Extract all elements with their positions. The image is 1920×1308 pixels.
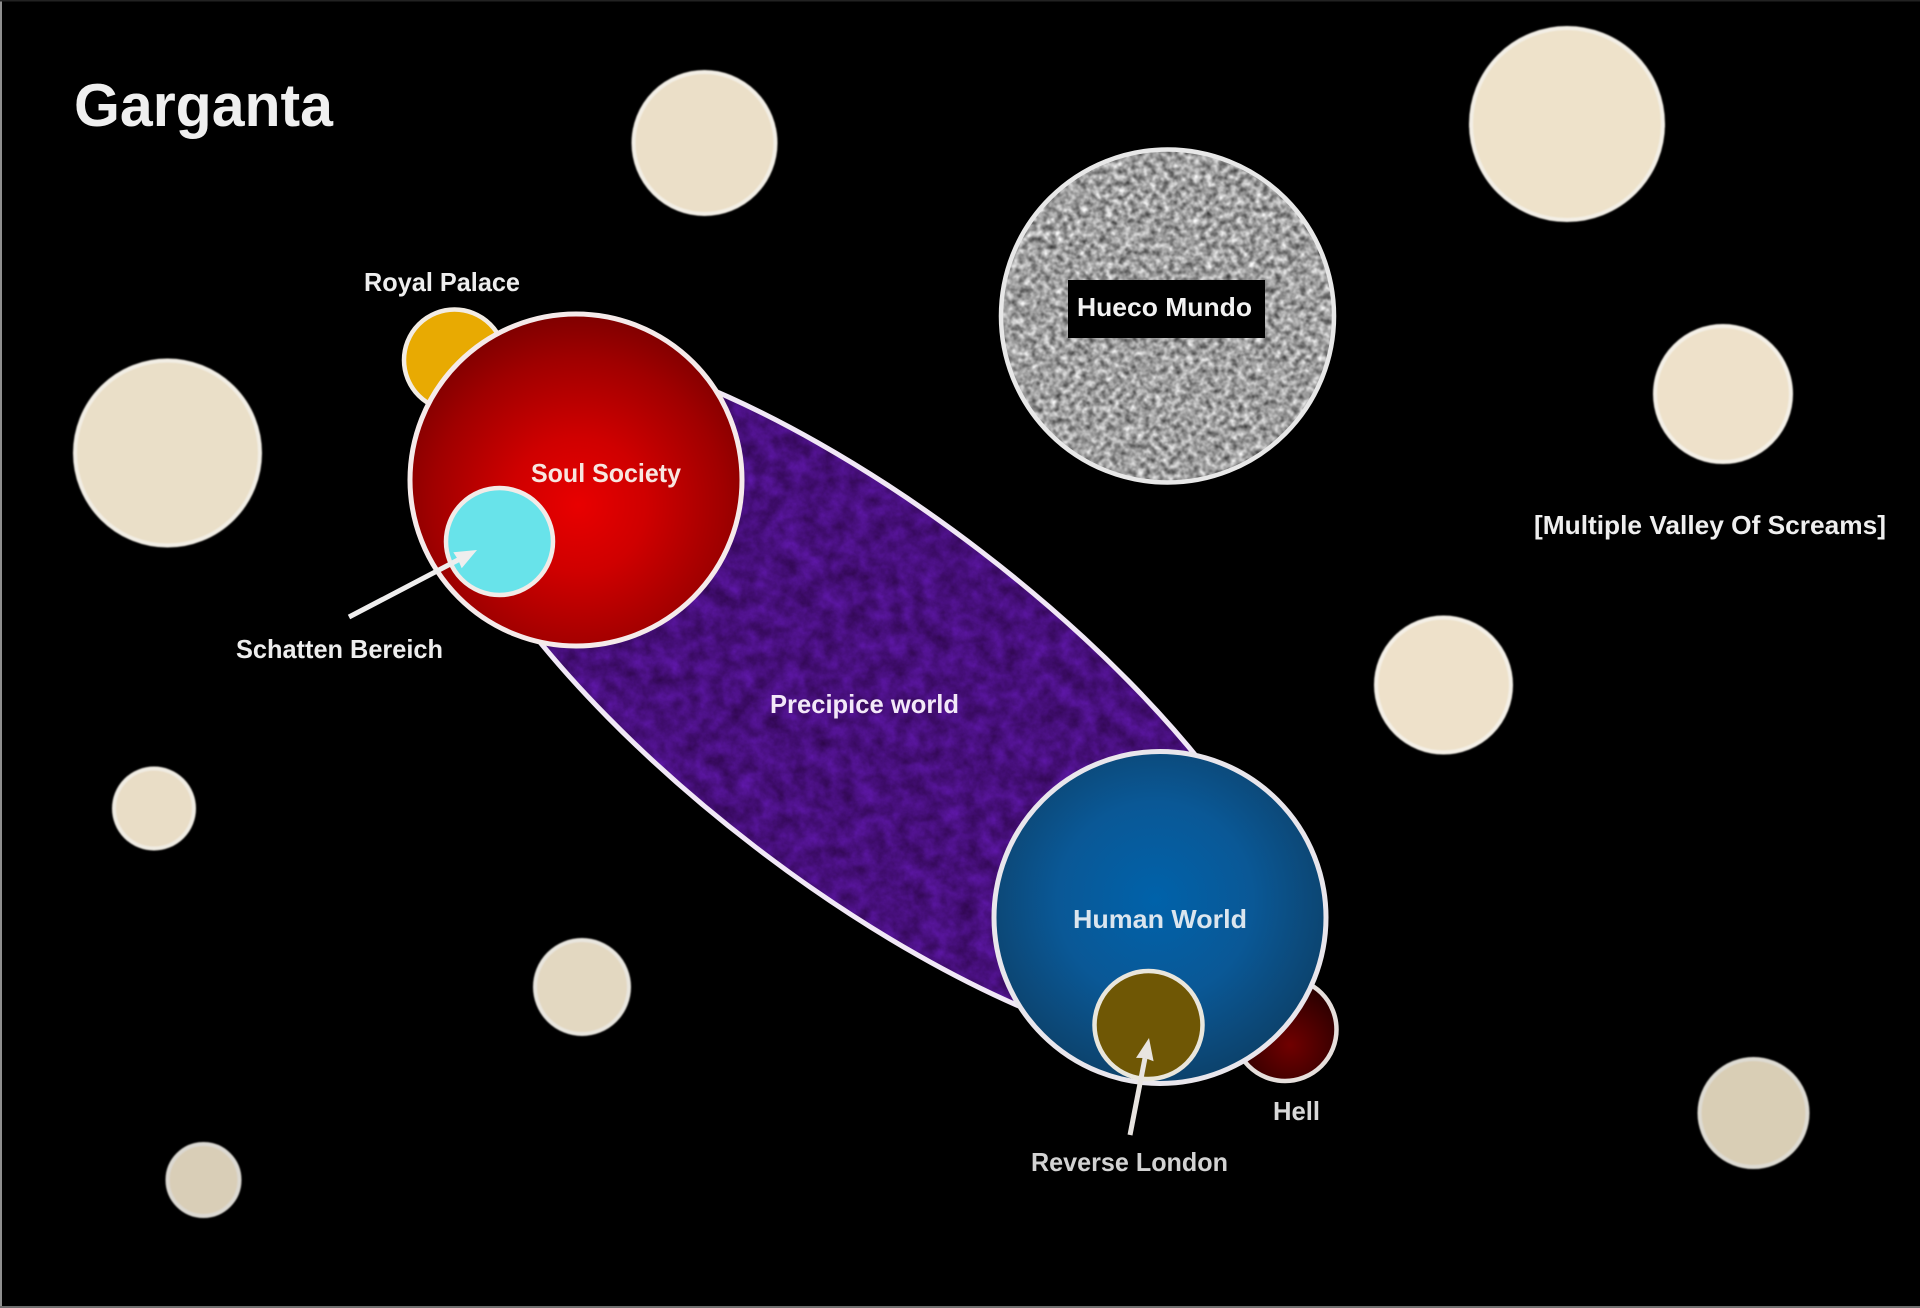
label: Reverse London: Reverse London xyxy=(1031,1147,1228,1177)
circle: bottom centre left xyxy=(535,940,629,1034)
title: Garganta xyxy=(74,72,334,139)
Schatten Bereich circle xyxy=(446,488,553,595)
circle: bottom right xyxy=(1700,1059,1808,1167)
circle: top centre xyxy=(634,72,776,214)
Hueco Mundo label box xyxy=(1068,280,1265,338)
circle: left small xyxy=(114,768,194,848)
Soul Society circle xyxy=(410,314,742,646)
label: Precipice world: Precipice world xyxy=(770,689,959,719)
Human World circle xyxy=(994,752,1326,1084)
arrow: to Reverse London xyxy=(1130,1038,1154,1135)
label: Royal Palace: Royal Palace xyxy=(364,267,520,297)
Hueco Mundo circle xyxy=(1000,149,1334,483)
Precipice world ellipse xyxy=(334,229,1402,1169)
label: Schatten Bereich: Schatten Bereich xyxy=(236,634,443,664)
circle: top right large xyxy=(1471,28,1663,220)
circle: left large xyxy=(75,360,260,546)
Reverse London circle xyxy=(1094,971,1202,1079)
circle: centre right xyxy=(1376,618,1511,752)
label: multiple valley of screams: [Multiple Valley Of Screams] xyxy=(1534,510,1886,540)
Royal Palace circle xyxy=(404,310,505,410)
Hell circle xyxy=(1234,978,1336,1081)
circle: right xyxy=(1655,326,1791,462)
Hueco Mundo label: Hueco Mundo xyxy=(1077,292,1252,322)
label: Human World: Human World xyxy=(1073,904,1247,934)
label: Soul Society: Soul Society xyxy=(531,458,682,488)
circle: bottom left xyxy=(168,1144,240,1216)
arrow: to Schatten Bereich xyxy=(349,550,477,617)
label: Hell: Hell xyxy=(1273,1096,1320,1126)
